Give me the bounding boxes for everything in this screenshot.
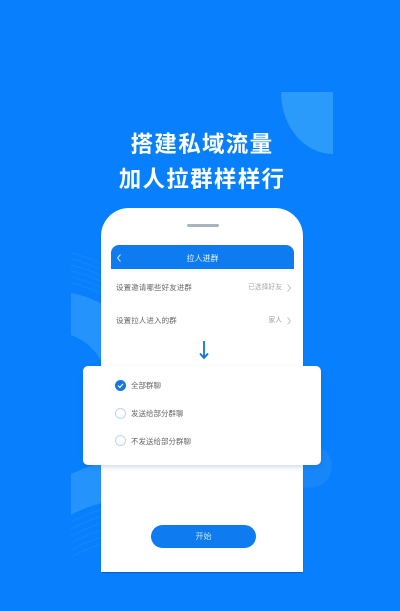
option: do not send to some groups: [115, 435, 191, 446]
left upper arc band: [71, 293, 102, 362]
option: send to some groups: [115, 408, 184, 419]
radio icon: [115, 435, 126, 446]
row: invite friends: [116, 283, 291, 292]
start button: 开始: [196, 532, 212, 541]
option: all groups: [115, 380, 161, 391]
speaker: [187, 224, 219, 227]
left upper stripes: [71, 253, 102, 294]
row chevron: [287, 317, 291, 325]
start button: [151, 525, 256, 548]
left lower stripes: [71, 509, 102, 557]
row value: 已选择好友: [248, 284, 282, 291]
left lower arc band: [71, 462, 102, 515]
back chevron: [116, 254, 121, 262]
row: target group: [116, 316, 291, 325]
option label: 全部群聊: [131, 381, 161, 390]
title: [119, 132, 285, 192]
option card: [83, 366, 321, 465]
header title: 拉人进群: [186, 254, 218, 263]
row label: 设置邀请哪些好友进群: [116, 283, 192, 292]
option label: 不发送给部分群聊: [131, 437, 191, 446]
row chevron: [287, 284, 291, 292]
option label: 发送给部分群聊: [131, 409, 184, 418]
top-right quarter circle: [281, 92, 333, 154]
header bar: [111, 245, 294, 269]
row label: 设置拉人进入的群: [116, 316, 177, 325]
phone mockup: [101, 208, 303, 572]
radio icon: [115, 408, 126, 419]
title line 1: 搭建私域流量: [131, 132, 273, 157]
down arrow: [199, 341, 209, 360]
title line 2: 加人拉群样样行: [119, 167, 285, 192]
checked icon: [115, 380, 126, 391]
right small circle: [288, 444, 332, 488]
row value: 家人: [268, 317, 282, 324]
